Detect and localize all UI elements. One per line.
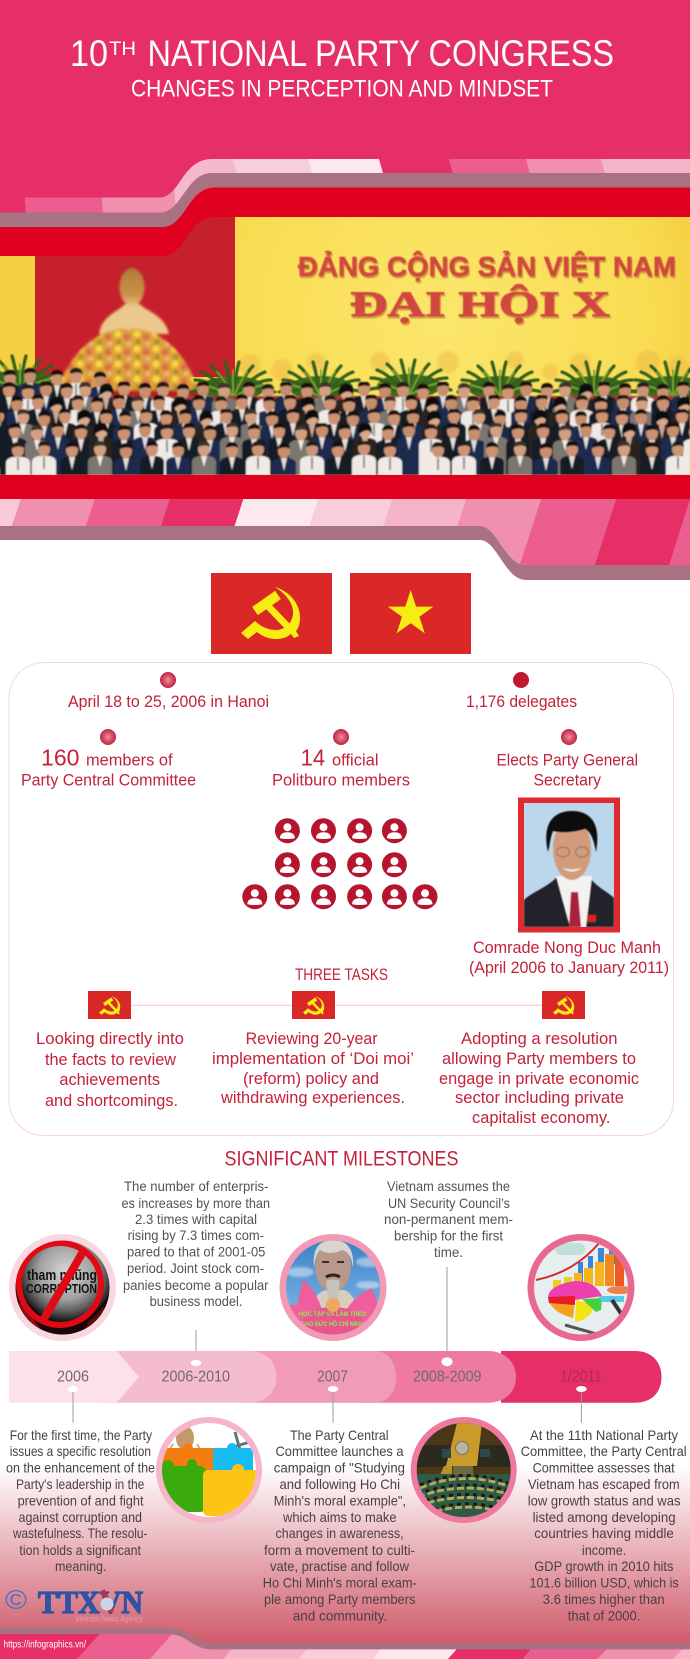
task 3 text: allowing Party members to — [442, 1050, 636, 1068]
milestone text: 2008-2009: time. — [434, 1244, 463, 1260]
image circle: anti-corruption — [9, 1234, 116, 1341]
milestone text: 2007: changes in awareness, — [276, 1525, 404, 1541]
year labels: 2007 — [317, 1369, 348, 1386]
milestone text: 2007: which aims to make — [282, 1509, 397, 1525]
fact: general secretary: Elects Party General — [496, 752, 638, 770]
logo: TTXVN: © — [5, 1585, 27, 1615]
year labels: 2008-2009 — [413, 1369, 482, 1386]
milestone text: 2006: meaning. — [55, 1558, 106, 1574]
fact: general secretary: Secretary — [534, 772, 602, 790]
heading: significant milestones: SIGNIFICANT MILESTONES — [224, 1148, 458, 1171]
portrait: Nong Duc Manh — [518, 798, 620, 932]
image circle: United Nations — [411, 1417, 517, 1523]
caption: portrait — [469, 939, 669, 977]
logo: TTXVN: TTXVN — [38, 1584, 143, 1620]
image circle: Ho Chi Minh: ĐẠO ĐỨC HỒ CHÍ MINH — [301, 1320, 364, 1328]
milestone text: 2006: prevention of and fight — [18, 1493, 144, 1509]
milestone text: 2007: Ho Chi Minh's moral exam- — [263, 1574, 417, 1590]
milestone text: 2006: tion holds a significant — [19, 1542, 141, 1558]
milestone text: 2006: issues a specific resolution — [10, 1443, 151, 1459]
fact: central committee — [21, 729, 196, 790]
caption: portrait: Comrade Nong Duc Manh — [473, 939, 661, 957]
fact: dates: April 18 to 25, 2006 in Hanoi — [68, 693, 269, 711]
image circle: anti-corruption: CORRUPTION — [26, 1281, 97, 1296]
fact: delegates — [466, 672, 577, 711]
panel: congress facts — [9, 662, 674, 1136]
top decorative ribbon — [0, 159, 690, 256]
title: CHANGES IN PERCEPTION AND MINDSET — [131, 76, 553, 102]
milestone text: 2007: The Party Central — [290, 1427, 389, 1443]
footer ribbon — [0, 1625, 690, 1659]
timeline dots — [68, 1357, 587, 1392]
milestone text: 2006: against corruption and — [18, 1509, 142, 1525]
bottom decorative ribbon — [0, 475, 690, 580]
task 2 text: (reform) policy and — [243, 1070, 379, 1088]
wall rosettes — [239, 350, 688, 381]
task 3 text: engage in private economic — [439, 1070, 639, 1088]
fact: politburo: 14 — [301, 744, 325, 770]
bust with flowers — [60, 266, 208, 397]
icons: 14 politburo members — [242, 818, 438, 909]
task 3 text: capitalist economy. — [472, 1109, 610, 1127]
fact: central committee: 160 — [41, 744, 80, 770]
milestone text: 2007: form a movement to culti- — [264, 1542, 415, 1558]
image circle: charts — [528, 1234, 634, 1341]
heading: three tasks: THREE TASKS — [295, 966, 388, 984]
image circle: Ho Chi Minh — [280, 1234, 386, 1341]
milestone text: 2008-2009: UN Security Council’s — [388, 1195, 510, 1211]
icon: task flag 3 — [542, 991, 585, 1019]
green piece — [160, 1466, 206, 1512]
task 1 text: Looking directly into — [36, 1030, 184, 1048]
milestone connector: 2008-2009 — [446, 1267, 448, 1358]
image circle: Ho Chi Minh: HỌC TẬP VÀ LÀM THEO — [299, 1311, 366, 1318]
connector line — [131, 1004, 542, 1006]
milestone text: 1/2011: GDP growth in 2010 hits — [534, 1558, 673, 1574]
source url: https://infographics.vn/ — [4, 1638, 86, 1650]
milestone text: 2006: wastefulness. The resolu- — [12, 1525, 148, 1541]
logo: TTXVN — [5, 1584, 143, 1624]
header background — [0, 0, 690, 212]
milestone text: 1/2011: countries having middle — [534, 1525, 674, 1541]
footer gradient — [0, 1465, 690, 1659]
red wall panel — [35, 217, 235, 377]
fact: politburo: Politburo members — [272, 772, 410, 790]
title: TH — [109, 39, 136, 60]
milestone text: 2007: Minh's moral example", — [274, 1493, 406, 1509]
milestone text: 1/2011: 3.6 times higher than — [543, 1591, 665, 1607]
plants — [0, 356, 690, 400]
task 2 text: implementation of ‘Doi moi’ — [212, 1050, 414, 1068]
task 2 text: Reviewing 20-year — [246, 1030, 378, 1048]
timeline bar — [9, 1351, 662, 1403]
blue piece — [213, 1448, 253, 1470]
left yellow strip — [0, 256, 35, 372]
title: 10 — [70, 33, 108, 74]
task 1 text — [36, 1030, 184, 1110]
fact: politburo: official — [332, 752, 378, 770]
fact: delegates: 1,176 delegates — [466, 693, 577, 711]
milestone text: 2007: campaign of "Studying — [274, 1460, 405, 1476]
year labels: 1/2011 — [560, 1369, 602, 1386]
image circle: puzzle — [156, 1417, 262, 1523]
fact: dates — [68, 672, 269, 711]
banner text — [298, 250, 676, 324]
title: NATIONAL PARTY CONGRESS — [148, 33, 614, 74]
image circle: anti-corruption: tham nhũng — [27, 1267, 97, 1284]
milestone text: 2007: Committee launches a — [276, 1443, 404, 1459]
caption: portrait: (April 2006 to January 2011) — [469, 959, 669, 977]
milestone text: 1/2011: listed among developing — [533, 1509, 676, 1525]
milestone text: 1/2011: income. — [582, 1542, 626, 1558]
task 3 text: Adopting a resolution — [461, 1030, 618, 1048]
title — [70, 33, 614, 102]
task 1 text: the facts to review — [45, 1051, 176, 1069]
task 3 text: sector including private — [455, 1089, 624, 1107]
milestone text: 1/2011: Committee assesses that — [533, 1460, 675, 1476]
milestone connectors below bar — [73, 1392, 581, 1423]
milestone text: 1/2011: that of 2000. — [568, 1608, 640, 1624]
milestone text: 2006-2010: pared to that of 2001-05 — [127, 1244, 266, 1260]
task 1 text: and shortcomings. — [45, 1092, 178, 1110]
milestone text: 2006-2010: 2.3 times with capital — [135, 1211, 257, 1227]
milestone text: 2007: and community. — [293, 1608, 387, 1624]
task 3 text — [439, 1030, 639, 1127]
banner text: ĐẢNG CỘNG SẢN VIỆT NAM — [298, 250, 676, 282]
milestone connector: 2006-2010 — [195, 1330, 197, 1362]
task 1 text: achievements — [59, 1071, 160, 1089]
year labels: 2006-2010 — [162, 1369, 230, 1386]
delegates crowd — [0, 368, 690, 475]
orange piece — [162, 1448, 215, 1474]
milestone text: 1/2011 — [521, 1427, 687, 1624]
task 2 text: withdrawing experiences. — [220, 1089, 405, 1107]
yellow piece — [203, 1470, 259, 1516]
milestone text: 2008-2009: bership for the first — [394, 1228, 503, 1244]
milestone text: 2008-2009 — [384, 1178, 513, 1260]
milestone text: 1/2011: low growth status and was — [528, 1493, 680, 1509]
icon: task flag 2 — [292, 991, 335, 1019]
milestone text: 2006-2010 — [122, 1178, 270, 1309]
logo: TTXVN: Vietnam News Agency — [75, 1615, 143, 1624]
milestone text: 2008-2009: non-permanent mem- — [384, 1211, 513, 1227]
milestone text: 2007: and following Ho Chi — [280, 1476, 400, 1492]
milestone text: 2006: on the enhancement of the — [6, 1460, 155, 1476]
icon: Vietnam flag — [350, 573, 471, 654]
panel: congress hall photo — [0, 217, 690, 475]
milestone text: 2007: ple among Party members — [264, 1591, 416, 1607]
milestone text: 2006-2010: period. Joint stock com- — [127, 1260, 264, 1276]
milestone text: 2006: Party's leadership in the — [16, 1476, 145, 1492]
milestone text: 2006-2010: The number of enterpris- — [124, 1178, 269, 1194]
icon: party flag — [211, 573, 332, 654]
milestone text: 2006-2010: rising by 7.3 times com- — [128, 1227, 264, 1243]
milestone text: 2008-2009: Vietnam assumes the — [387, 1178, 510, 1194]
milestone text: 2006-2010: panies become a popular — [123, 1277, 269, 1293]
milestone text: 2006-2010: business model. — [150, 1293, 242, 1309]
fact: central committee: members of — [86, 752, 173, 770]
fact: politburo — [272, 729, 410, 790]
milestone text: 1/2011: At the 11th National Party — [530, 1427, 678, 1443]
year labels — [57, 1369, 602, 1386]
fact: central committee: Party Central Committee — [21, 772, 196, 790]
milestone text: 2007 — [263, 1427, 417, 1624]
milestone text: 2006: For the first time, the Party — [10, 1427, 152, 1443]
milestone text: 2006 — [6, 1427, 155, 1574]
task 2 text — [212, 1030, 414, 1107]
milestone text: 1/2011: Vietnam has escaped from — [528, 1476, 680, 1492]
milestone text: 2006-2010: es increases by more than — [122, 1195, 270, 1211]
milestone text: 2007: vate, practise and follow — [270, 1558, 410, 1574]
fact: general secretary — [496, 729, 638, 790]
icon: task flag 1 — [88, 991, 131, 1019]
banner text: ĐẠI HỘI X — [350, 284, 610, 324]
year labels: 2006 — [57, 1369, 89, 1386]
